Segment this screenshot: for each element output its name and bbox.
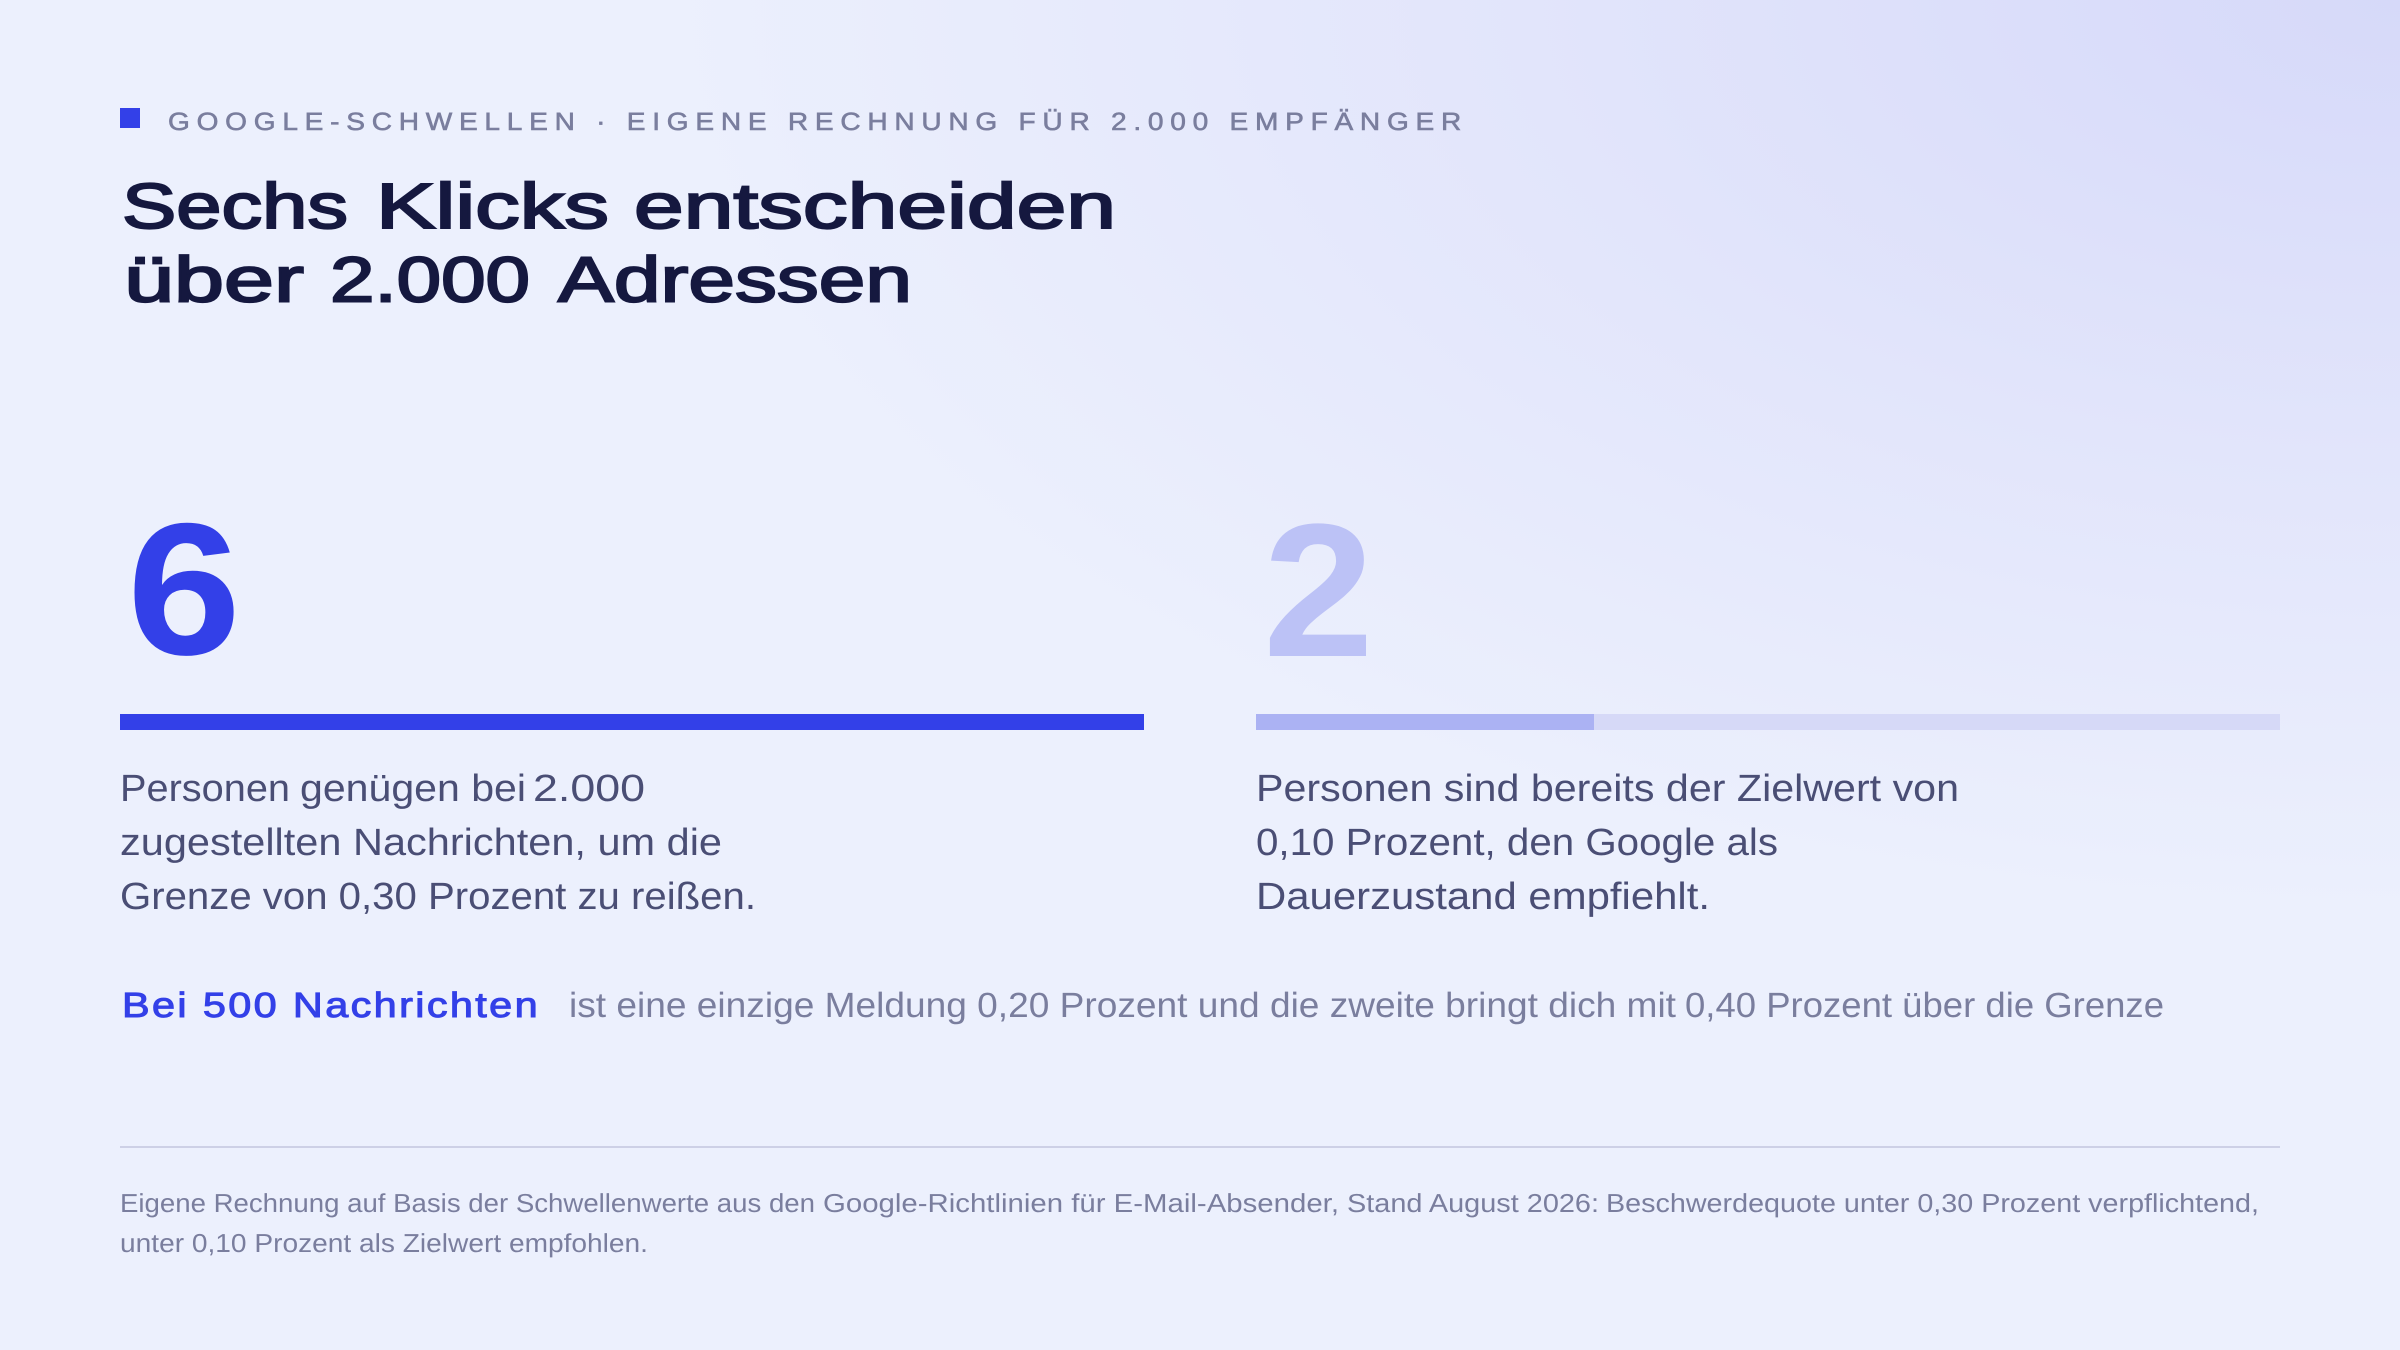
footer rule	[120, 1146, 2280, 1148]
bar: full	[120, 714, 1144, 730]
title: 2.000	[330, 244, 530, 316]
note highlight: Bei 500 Nachrichten	[122, 986, 540, 1025]
text block: six persons: zugestellten Nachrichten, um die	[120, 822, 722, 864]
eyebrow	[120, 108, 1468, 136]
text block: six persons: 2.000	[533, 768, 645, 810]
source note: Stand August 2026:	[1347, 1188, 1599, 1218]
title: entscheiden	[634, 170, 1116, 242]
title: Adressen	[558, 244, 912, 316]
title: über	[124, 244, 304, 316]
note text: 0,40 Prozent über die Grenze	[1685, 986, 2164, 1025]
eyebrow text: GOOGLE-SCHWELLEN · EIGENE RECHNUNG FÜR 2.000 EMPFÄNGER	[168, 108, 1468, 136]
panel: six persons	[120, 484, 1144, 918]
title	[122, 170, 1116, 316]
text block: six persons: Personen	[120, 768, 290, 810]
source note: unter 0,10 Prozent als Zielwert empfohlen.	[120, 1228, 648, 1258]
text block: two persons	[1256, 768, 1959, 918]
source note: Beschwerdequote unter 0,30 Prozent verpflichtend,	[1606, 1188, 2259, 1218]
panel: two persons	[1256, 485, 2280, 918]
title: Klicks	[376, 170, 609, 242]
text block: two persons: 0,10 Prozent, den Google als	[1256, 822, 1778, 864]
bar: track with one third fill	[1256, 714, 2280, 730]
text block: six persons: genügen bei	[300, 768, 526, 810]
note text: ist eine einzige Meldung 0,20 Prozent und die zweite bringt dich mit	[569, 986, 1676, 1025]
text block: two persons: Dauerzustand empfiehlt.	[1256, 876, 1710, 918]
icon: accent square	[120, 108, 140, 128]
big number 6: 6	[127, 484, 241, 694]
note line	[122, 986, 2164, 1025]
note text	[569, 986, 2164, 1025]
text block: six persons: Grenze von 0,30 Prozent zu reißen.	[120, 876, 756, 918]
source note: Google-Richtlinien für E-Mail-Absender,	[823, 1188, 1339, 1218]
text block: two persons: Personen sind bereits der Zielwert von	[1256, 768, 1959, 810]
big number 2: 2	[1263, 485, 1374, 697]
title: Sechs	[122, 170, 348, 242]
text block: six persons	[120, 768, 756, 918]
source note: Eigene Rechnung auf Basis der Schwellenwerte aus den	[120, 1188, 815, 1218]
source note	[120, 1188, 2259, 1258]
